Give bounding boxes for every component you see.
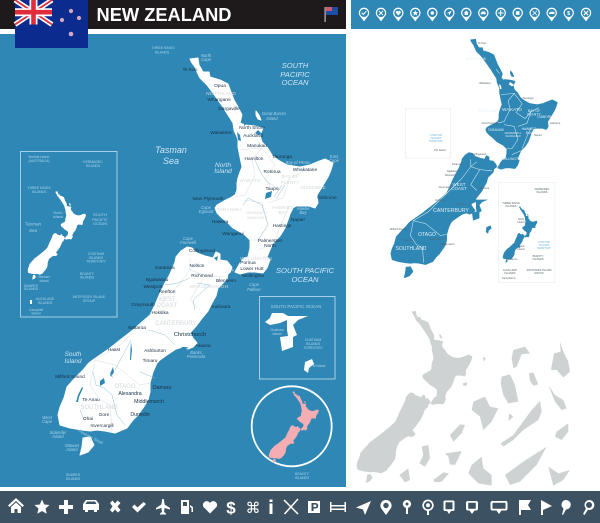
- blue regional map of New Zealand: Ngakawau: [447, 169, 460, 173]
- blue regional map of New Zealand: New Plymouth: [482, 121, 499, 125]
- inset: New Zealand region: OCEAN: [93, 221, 107, 226]
- blue regional map of New Zealand: Christchurch: [456, 202, 471, 206]
- inset: blue New Zealand region: TERRITORY: [537, 247, 552, 250]
- inset: Chatham Islands: [260, 296, 335, 379]
- map labels: region names: MARLBOROUGH: [190, 284, 229, 290]
- inset: blue Chatham Islands: CHATHAM: [430, 134, 442, 137]
- map labels: cities: Middlemarch: [134, 399, 164, 405]
- blue regional map of New Zealand: HAWKE'S: [522, 127, 537, 131]
- map labels: cities: Westport: [143, 284, 163, 290]
- inset: New Zealand region: ISLANDS: [86, 164, 101, 168]
- map labels: seas and capes: Island: [66, 447, 78, 452]
- blue regional map of New Zealand: Middlemarch: [440, 242, 455, 246]
- map labels: seas and capes: North: [201, 53, 212, 58]
- icon: plane: [156, 499, 170, 514]
- inset: New Zealand region: CHATHAM: [88, 252, 104, 256]
- locator circle with pink New Zealand: [252, 386, 332, 466]
- inset: blue New Zealand region: South: [518, 244, 525, 248]
- icon: magnifier pin: [583, 500, 594, 515]
- map labels: seas and capes: PACIFIC: [280, 70, 310, 79]
- inset: blue New Zealand region: CHATHAM: [538, 241, 550, 244]
- inset: blue New Zealand region: Island: [518, 247, 525, 251]
- map labels: seas and capes: ISLANDS: [155, 50, 170, 54]
- map labels: cities: North Shore: [239, 125, 265, 131]
- icon: fork and knife: [284, 499, 298, 514]
- blue regional map of New Zealand: Collingwood: [472, 152, 487, 156]
- map labels: region names: BAY OF: [281, 174, 299, 180]
- icon: plus: [59, 500, 73, 514]
- inset: New Zealand region: Island: [31, 312, 41, 316]
- blue regional map of New Zealand: Te Kao: [478, 41, 487, 45]
- map labels: seas and capes: Palliser: [247, 287, 261, 292]
- inset: New Zealand region: (AUSTRALIA): [28, 159, 50, 163]
- inset: blue New Zealand region: THREE KINGS: [502, 201, 520, 205]
- blue regional map of New Zealand: SOUTHLAND: [396, 246, 427, 252]
- blue regional map of New Zealand: Gisborne: [550, 121, 561, 125]
- inset: New Zealand region: BOUNTY: [80, 272, 95, 276]
- map labels: cities: Akaroa: [195, 343, 211, 349]
- inset: New Zealand region: Norfolk Island: [29, 155, 49, 159]
- blue regional map of New Zealand: Tauranga: [523, 96, 534, 100]
- inset: New Zealand region: Island: [39, 279, 49, 283]
- map labels: cities: Dunedin: [130, 412, 150, 418]
- icon: speech bubble: [466, 501, 478, 514]
- blue regional map of New Zealand: WANGANUI: [505, 134, 521, 138]
- inset: New Zealand region: ANTIPODES ISLAND: [73, 295, 106, 299]
- map labels: seas and capes: OCEAN: [291, 275, 319, 284]
- map labels: seas and capes: Island: [64, 358, 82, 365]
- rivers: [80, 160, 285, 425]
- map labels: seas and capes: Stewart: [65, 443, 80, 448]
- map labels: cities: Rotorua: [263, 169, 281, 175]
- map labels: seas and capes: Solander: [50, 430, 67, 435]
- icon: bed: [330, 502, 346, 512]
- inset: New Zealand region: Island: [53, 215, 63, 219]
- flag of New Zealand: [15, 0, 88, 48]
- blue regional map of New Zealand: WEST: [452, 182, 466, 187]
- blue regional map of New Zealand: WELLINGTON: [501, 157, 523, 161]
- blue regional map of New Zealand: BAY OF: [528, 109, 540, 113]
- blue regional map of New Zealand: Greymouth: [439, 185, 452, 189]
- inset: New Zealand region: KERMADEC: [83, 160, 103, 164]
- map labels: seas and capes: Great Barrier: [262, 111, 287, 116]
- map labels: seas and capes: West: [42, 415, 53, 420]
- blue regional map of New Zealand: CANTERBURY: [433, 208, 469, 214]
- icon: parking: [308, 501, 320, 513]
- icon: target pin: [422, 500, 434, 515]
- map labels: cities: Waitakere: [210, 130, 232, 136]
- inset: New Zealand region: THREE KINGS: [28, 186, 51, 190]
- map labels: seas and capes: Tasman: [155, 145, 187, 155]
- map labels: cities: Opua: [214, 83, 226, 89]
- blue regional map of New Zealand: OTAGO: [418, 232, 436, 238]
- map labels: region names: PLENTY: [281, 180, 300, 186]
- icon: command symbol: ⌘: [246, 499, 260, 517]
- inset: Chatham Islands: SOUTH PACIFIC OCEAN: [271, 304, 321, 309]
- map labels: region names: COAST: [157, 303, 178, 309]
- title: NEW ZEALAND: [96, 5, 232, 25]
- map labels: cities: Kaikoura: [212, 304, 231, 310]
- blue regional map of New Zealand: COAST: [451, 186, 467, 191]
- map labels: cities: Ngakawau: [146, 277, 169, 283]
- map labels: cities: Auckland: [243, 133, 263, 139]
- map labels: seas and capes: Sea: [163, 156, 179, 166]
- blue regional map of New Zealand: Napier: [534, 133, 542, 137]
- map labels: cities: Blenheim: [216, 278, 236, 284]
- inset: New Zealand region: Tasman: [25, 222, 42, 226]
- icon: car: [83, 500, 99, 512]
- inset: blue New Zealand region: AUCKLAND: [503, 268, 517, 272]
- map labels: region names: CANTERBURY: [155, 321, 197, 327]
- blue regional map of New Zealand: Kaikoura: [479, 186, 490, 190]
- map labels: cities: Whakatane: [293, 167, 317, 173]
- blue regional map of New Zealand: Alexandra: [430, 237, 442, 241]
- inset: blue New Zealand region: KERMADEC: [535, 187, 549, 191]
- map labels: region names: GISBORNE: [300, 185, 326, 191]
- inset: New Zealand region: SOUTH: [93, 212, 107, 217]
- blue regional map of New Zealand: AUCKLAND: [478, 109, 498, 113]
- map labels: region names: SOUTHLAND: [80, 405, 118, 411]
- map labels: seas and capes: Peninsula: [187, 354, 206, 359]
- map labels: seas and capes: Bay: [299, 210, 308, 215]
- inset: New Zealand region: GROUP: [83, 299, 96, 303]
- map labels: seas and capes: OCEAN: [281, 78, 309, 87]
- map labels: seas and capes: Cape: [201, 57, 212, 62]
- inset: blue New Zealand region: ISLANDS: [532, 257, 544, 261]
- inset: blue New Zealand region: ISLANDS: [539, 244, 550, 247]
- map labels: cities: Ashburton: [144, 348, 166, 354]
- map labels: seas and capes: SOUTH: [282, 61, 309, 70]
- map labels: region names: WANGANUI: [247, 216, 267, 220]
- blue regional map of New Zealand: Milford Sound: [390, 227, 407, 231]
- map labels: region names: TARANAKI: [217, 207, 241, 213]
- inset: New Zealand region: TERRITORY: [86, 260, 106, 264]
- icon: pennant: [541, 500, 552, 515]
- map labels: cities: Timaru: [143, 358, 158, 364]
- map labels: region names: HAWKE'S: [272, 205, 294, 211]
- inset: blue New Zealand region: Island: [518, 220, 525, 224]
- map labels: cities: Gore: [99, 412, 110, 418]
- map labels: cities: Nelson: [190, 263, 205, 269]
- map labels: cities: Alexandra: [118, 391, 142, 397]
- map labels: cities: Wanganui: [222, 231, 244, 237]
- icon: house: [8, 498, 24, 513]
- inset: Chatham Islands: TERRITORY: [303, 346, 323, 350]
- map labels: seas and capes: Bay of Plenty: [286, 160, 311, 165]
- inset: New Zealand region: ISLANDS: [89, 256, 104, 260]
- inset: blue New Zealand region: BOUNTY: [533, 254, 544, 258]
- map labels: cities: Te Kao: [183, 67, 198, 73]
- map labels: cities: Hamilton: [245, 156, 264, 162]
- map labels: region names: BAY: [278, 210, 288, 216]
- blue regional map of New Zealand: Hokitika: [435, 198, 445, 202]
- blue regional map of New Zealand: GISBORNE: [537, 115, 556, 119]
- inset: blue New Zealand region: ISLANDS: [505, 204, 517, 208]
- blue regional map of New Zealand: NORTHLAND: [466, 57, 487, 61]
- map labels: cities: Napier: [291, 217, 305, 223]
- map labels: seas and capes: Farewell: [180, 240, 197, 245]
- map labels: cities: Tauranga: [272, 154, 292, 160]
- map labels: cities: Ohai: [83, 416, 93, 422]
- map labels: cities: Haast: [108, 347, 121, 353]
- map labels: seas and capes: Cape: [201, 205, 212, 210]
- inset: blue Chatham Islands: Pitt Island: [434, 148, 446, 152]
- map labels: seas and capes: ISLANDS: [295, 476, 310, 480]
- inset: blue New Zealand region: North: [518, 217, 525, 221]
- map labels: cities: Lower Hutt: [240, 266, 264, 272]
- inset: New Zealand region: Sea: [29, 228, 38, 233]
- blue regional map of New Zealand: BAY: [526, 131, 533, 135]
- inset: New Zealand region: ISLANDS: [24, 287, 39, 291]
- inset: blue New Zealand region: GROUP: [534, 271, 544, 275]
- inset: blue New Zealand region: ISLANDS: [504, 271, 516, 275]
- inset: blue Chatham Islands: TERRITORY: [429, 140, 444, 143]
- icon: notched flag: [519, 500, 531, 515]
- map labels: region names: WELLINGTON: [240, 256, 272, 262]
- inset: blue New Zealand region: Stewart Is.: [506, 257, 518, 261]
- map labels: cities: Karamea: [155, 265, 175, 271]
- map labels: region names: MANAWATU-: [246, 211, 269, 215]
- map labels: seas and capes: Egmont: [199, 209, 214, 214]
- icon: wide speech bubble: [490, 501, 508, 514]
- map labels: cities: Wellington: [242, 273, 264, 279]
- header bar: [0, 0, 346, 29]
- inset: blue New Zealand region: [498, 182, 555, 282]
- icon: ball pin: [562, 500, 571, 515]
- inset: New Zealand region: ISLANDS: [32, 190, 47, 194]
- map labels: cities: Porirua: [240, 260, 256, 266]
- bottom icon toolbar: [0, 491, 600, 523]
- blue regional map of New Zealand: Te Anau: [403, 238, 413, 242]
- map labels: seas and capes: Cape: [329, 158, 340, 163]
- map labels: seas and capes: SOUTH PACIFIC: [276, 266, 335, 275]
- map labels: cities: Hawera: [212, 219, 229, 225]
- icon: location pin: [380, 500, 392, 515]
- inset: New Zealand region: ISLANDS: [38, 301, 53, 305]
- blue regional map of New Zealand: PLENTY: [527, 112, 541, 116]
- blue map panel: [0, 34, 346, 487]
- map labels: cities: Milford Sound: [55, 374, 85, 380]
- map labels: region names: WEST: [158, 297, 176, 303]
- inset: blue New Zealand region: ISLANDS: [536, 190, 548, 194]
- map labels: cities: Christchurch: [174, 332, 206, 338]
- map labels: seas and capes: North: [215, 162, 231, 169]
- inset: Chatham Islands: Pitt Island: [311, 364, 326, 368]
- icon: fuel pump: [181, 500, 193, 514]
- blue regional map of New Zealand: TARANAKI: [488, 128, 504, 132]
- map labels: cities: Invercargill: [90, 423, 114, 429]
- map labels: seas and capes: Cape: [183, 236, 194, 241]
- map labels: cities: Whangarei: [207, 97, 231, 103]
- map labels: cities: Oamaru: [153, 385, 171, 391]
- main map of New Zealand: [58, 58, 333, 455]
- blue regional map of New Zealand: Westport: [445, 173, 455, 177]
- icon: cross: [110, 500, 120, 512]
- blue regional map of New Zealand: [390, 39, 561, 278]
- icon: small location pin: [403, 500, 411, 514]
- blue regional map of New Zealand: Karamea: [452, 162, 463, 166]
- map labels: seas and capes: Cape: [42, 419, 53, 424]
- inset: New Zealand region: AUCKLAND: [36, 297, 55, 301]
- map labels: cities: Reefton: [159, 289, 176, 295]
- map labels: seas and capes: BOUNTY: [295, 472, 310, 476]
- map labels: cities: Manukau: [247, 143, 267, 149]
- map labels: seas and capes: East: [330, 154, 339, 159]
- inset: blue Chatham Islands: ISLANDS: [431, 137, 442, 140]
- map labels: cities: Hokitika: [151, 310, 169, 316]
- blue regional map of New Zealand: Waitakere: [479, 81, 491, 85]
- map labels: region names: OTAGO: [114, 384, 136, 390]
- map labels: cities: Wataroa: [128, 325, 146, 331]
- right header bar with pin icons: $: [567, 11, 570, 17]
- map labels: seas and capes: Cape: [249, 282, 260, 287]
- inset: New Zealand region: Campbell: [29, 308, 43, 312]
- icon: dollar: $: [226, 498, 236, 518]
- grey silhouette map with separated regions: [357, 312, 570, 486]
- map labels: cities: New Plymouth: [193, 196, 224, 202]
- map labels: cities: Gisborne: [317, 195, 337, 201]
- map labels: cities: North: [264, 243, 276, 249]
- map labels: cities: [55, 67, 337, 429]
- map labels: cities: Dargaville: [218, 106, 240, 112]
- blue regional map of New Zealand: WAIKATO: [502, 107, 522, 112]
- map labels: cities: Collingwood: [189, 248, 215, 254]
- icon: square pin: [444, 500, 454, 514]
- map labels: cities: Te Anau: [82, 397, 100, 403]
- map labels: seas and capes: [42, 46, 340, 481]
- map labels: seas and capes: Banks: [190, 350, 203, 355]
- map labels: cities: Hastings: [273, 223, 292, 229]
- map labels: region names: NORTHLAND: [206, 91, 236, 97]
- map labels: region names: [80, 91, 326, 411]
- icon: check: [132, 502, 146, 512]
- map labels: seas and capes: South: [65, 351, 82, 358]
- map labels: cities: Taupo: [265, 186, 279, 192]
- inset: Chatham Islands: ISLANDS: [306, 342, 321, 346]
- map labels: cities: Richmond: [191, 273, 213, 279]
- icon: small flag: [325, 7, 338, 22]
- inset: Chatham Islands: Island: [272, 332, 282, 336]
- inset: blue Chatham Islands: [406, 108, 492, 234]
- inset: New Zealand region: [20, 152, 117, 317]
- map labels: seas and capes: Island: [52, 434, 64, 439]
- inset: New Zealand region: PACIFIC: [92, 217, 108, 222]
- icon: navigation arrow: [356, 501, 371, 515]
- map labels: seas and capes: Island: [214, 168, 232, 175]
- map labels: seas and capes: Island: [266, 116, 278, 121]
- inset: Chatham Islands: Chatham: [270, 328, 284, 332]
- map labels: seas and capes: THREE KINGS: [152, 46, 175, 50]
- map labels: seas and capes: ISLANDS: [66, 477, 81, 481]
- icon: star: [34, 500, 50, 514]
- map labels: region names: WAIKATO: [239, 178, 261, 184]
- map labels: seas and capes: SNARES: [66, 473, 81, 477]
- map labels: seas and capes: Foveaux Strait: [78, 428, 105, 446]
- inset: New Zealand region: North: [53, 211, 63, 215]
- map labels: cities: Greymouth: [131, 302, 155, 308]
- inset: New Zealand region: Stewart: [38, 275, 50, 279]
- lakes and harbours: [76, 121, 272, 402]
- inset: blue New Zealand region: Campbell Is.: [502, 276, 516, 280]
- right header bar with pin icons: [351, 0, 600, 29]
- inset: blue New Zealand region: ANTIPODES ISLAND: [526, 268, 552, 272]
- icon: heart: [203, 501, 217, 514]
- inset: New Zealand region: SNARES: [24, 284, 39, 288]
- map labels: cities: Palmerston: [258, 238, 282, 244]
- map labels: seas and capes: Hawke: [297, 206, 310, 211]
- inset: Chatham Islands: CHATHAM: [305, 338, 321, 342]
- icon: info: [270, 500, 272, 514]
- inset: New Zealand region: ISLANDS: [80, 276, 95, 280]
- blue regional map of New Zealand: MANAWATU-: [505, 131, 521, 135]
